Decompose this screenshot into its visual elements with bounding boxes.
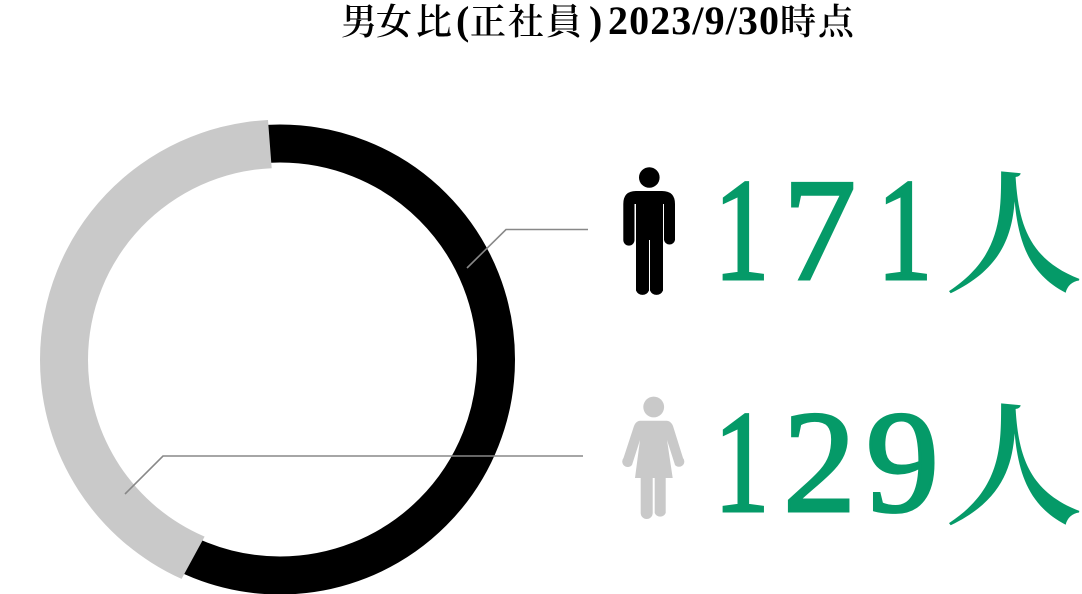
male count: 1	[714, 150, 769, 312]
male unit: 人	[944, 129, 1082, 321]
female count	[714, 381, 939, 544]
donut chart	[40, 120, 496, 579]
segment: male 171	[64, 144, 496, 576]
leader line: male	[467, 230, 588, 268]
segment: female 129	[40, 120, 272, 579]
male count: 7	[783, 149, 856, 311]
female count: 9	[866, 381, 939, 543]
leader line: female	[125, 456, 583, 494]
icon: woman	[622, 397, 684, 519]
icon: man	[623, 167, 675, 295]
female unit: 人	[944, 361, 1082, 553]
female count: 2	[783, 381, 856, 543]
male count: 1	[877, 150, 932, 312]
female count: 1	[714, 382, 769, 544]
male count	[714, 149, 932, 312]
